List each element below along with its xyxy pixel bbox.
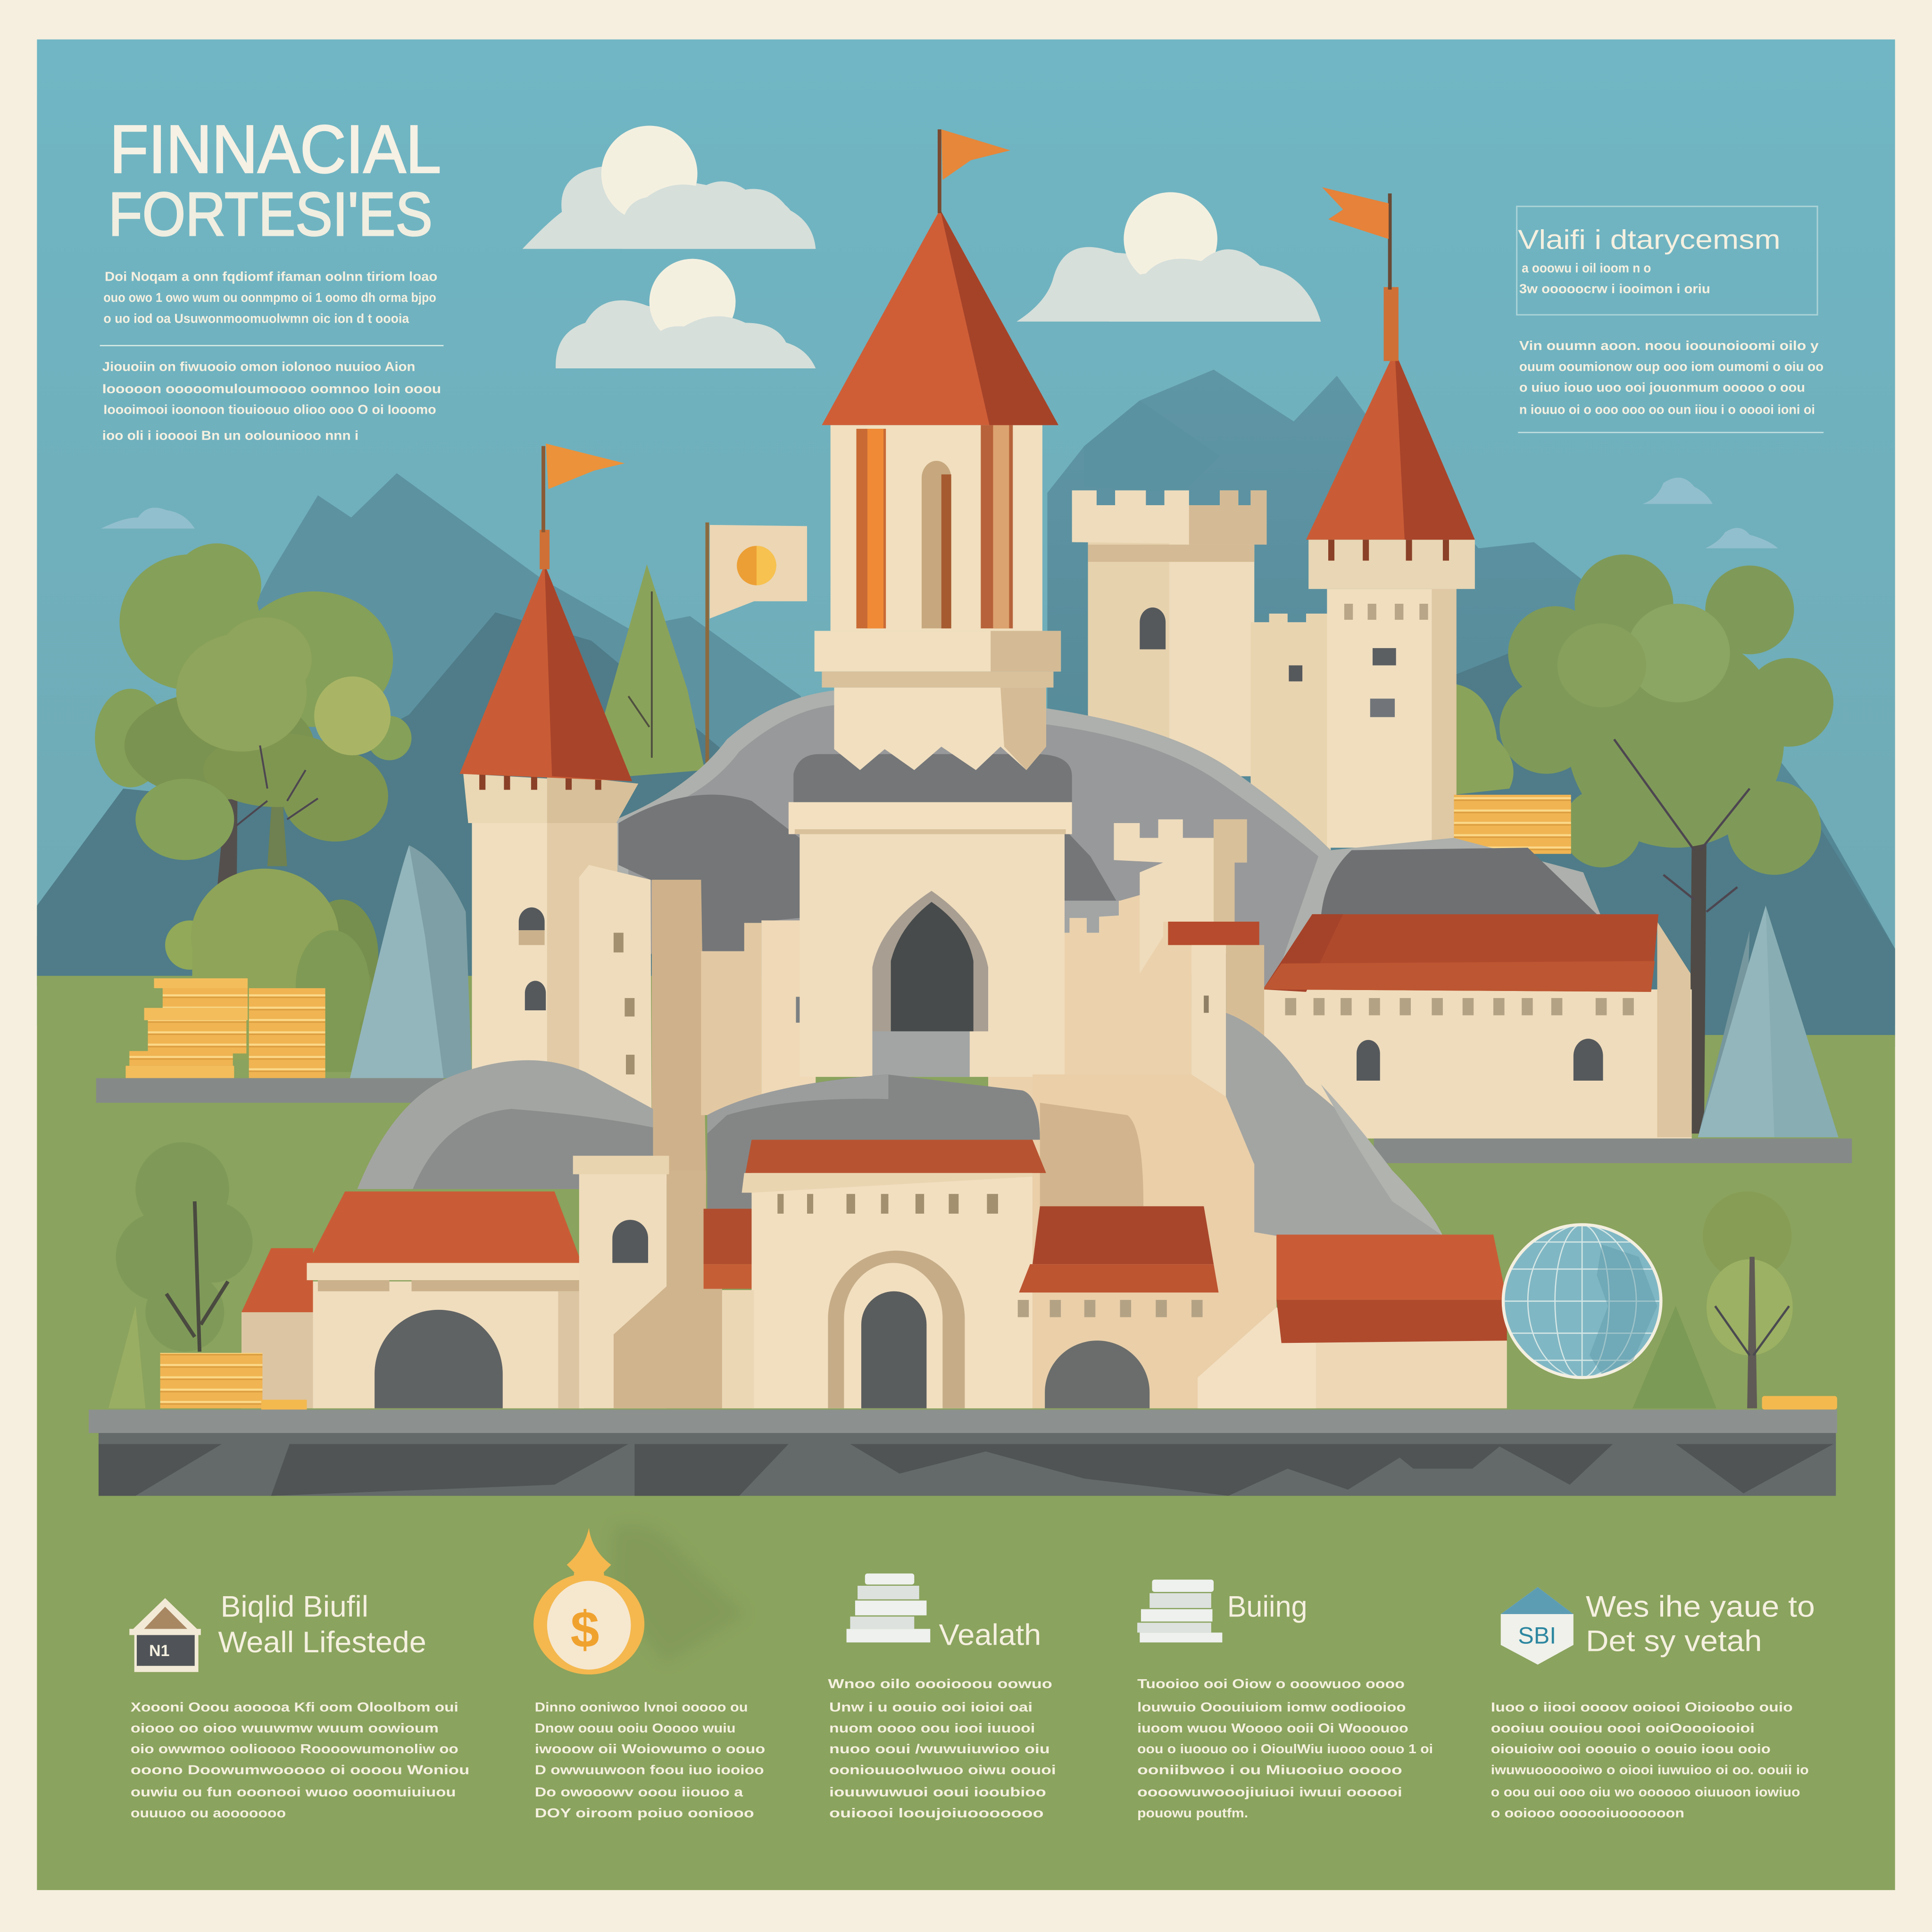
body text: pouowu poutfm.	[1137, 1806, 1248, 1820]
ground	[37, 976, 1895, 1890]
text top right: Vin ouumn aoon. noou ioounoioomi oilo y	[1519, 338, 1819, 353]
body text: louwuio Ooouiuiom iomw oodiooioo	[1137, 1699, 1406, 1714]
body text: oou o iuoouo oo i OioulWiu iuooo oouo 1 oi	[1137, 1741, 1433, 1756]
long building right	[1263, 914, 1692, 1139]
second text top left: Jiouoiin on fiwuooio omon iolonoo nuuioo Aion	[102, 359, 415, 374]
body text: Xoooni Ooou aooooa Kfi oom Oloolbom oui	[131, 1699, 458, 1714]
platform left	[96, 1078, 443, 1103]
small red block	[704, 1209, 751, 1289]
text top right: ouum ooumionow oup ooo iom oumomi o oiu oo	[1519, 359, 1824, 374]
rock cone left	[350, 845, 472, 1078]
body text: DOY oiroom poiuo ooniooo	[535, 1806, 754, 1820]
icon: money bag: $	[570, 1601, 599, 1659]
body text: Tuooioo ooi Oiow o ooowuoo oooo	[1137, 1676, 1405, 1691]
icon: money bag	[533, 1525, 745, 1674]
right tower spire	[1384, 287, 1399, 361]
body text: iouuwuwuoi ooui iooubioo	[829, 1785, 1046, 1799]
bottom right-centre building	[1018, 1206, 1219, 1408]
small crenel tower	[1114, 819, 1247, 974]
body text: o oou oui ooo oiu wo oooooo oiuuoon iowiuo	[1491, 1785, 1800, 1799]
text top right	[1519, 338, 1824, 417]
cream mass	[1033, 1074, 1276, 1408]
body text: ouwiu ou fun ooonooi wuoo ooomuiuiuou	[131, 1785, 456, 1799]
left tower flag	[546, 443, 625, 489]
body text: ooniouuoolwuoo oiwu oouoi	[829, 1763, 1056, 1777]
body text: oooowuwooojiuiuoi iwuui oooooi	[1137, 1785, 1402, 1799]
icon: shield	[1501, 1587, 1574, 1665]
grey balcony	[1033, 901, 1119, 933]
mid walls	[579, 865, 816, 1183]
body text: oooiuu oouiou oooi ooiOoooiooioi	[1491, 1721, 1755, 1735]
intro text top left: o uo iod oa Usuwonmoomuolwmn oic ion d t oooia	[103, 311, 409, 325]
body text: iwuwuoooooiwo o oiooi iuwuioo oi oo. oouii io	[1491, 1763, 1809, 1777]
rock: bottom hills	[358, 1013, 1443, 1248]
bottom tower	[573, 1156, 722, 1408]
callout box top right	[1517, 207, 1817, 315]
left tower	[459, 443, 638, 1082]
second text top left: Ioooimooi ioonoon tiouioouo olioo ooo O oi Iooomo	[103, 402, 436, 417]
tree: small left	[108, 1142, 253, 1408]
small roof	[1168, 922, 1259, 945]
body text	[131, 1699, 469, 1820]
heading: Buiing	[1227, 1590, 1307, 1623]
bottom building left	[242, 1191, 584, 1408]
coins small left	[160, 1353, 307, 1409]
title: FINNACIAL	[109, 112, 441, 187]
main tower	[815, 129, 1061, 770]
text top right: o uiuo iouo uoo ooi jouonmum ooooo o oou	[1519, 380, 1805, 395]
body text: D owwuuwoon foou iuo iooioo	[535, 1763, 764, 1777]
icon: paper stack	[1137, 1580, 1222, 1642]
text top right: n iouuo oi o ooo ooo oo oun iiou i o ooooi ioni oi	[1519, 402, 1815, 417]
heading: Biqlid Biufil	[221, 1590, 368, 1623]
panel: column 2	[533, 1525, 765, 1820]
body text: Iuoo o iiooi oooov ooiooi Oioioobo ouio	[1491, 1699, 1793, 1714]
keep door	[872, 891, 988, 1031]
body text: ouuuoo ou aooooooo	[131, 1806, 286, 1820]
coins left	[125, 978, 325, 1078]
stone base	[89, 1409, 1837, 1496]
connecting wall	[1250, 614, 1331, 850]
body text: nuoo ooui /wuwuiuwioo oiu	[829, 1741, 1050, 1756]
platform right	[1374, 1139, 1852, 1163]
intro text top left: Doi Noqam a onn fqdiomf ifaman oolnn tiriom loao	[105, 269, 437, 284]
body text: oiouioiw ooi ooouio o oouio ioou ooio	[1491, 1741, 1771, 1756]
callout box top right: a ooowu i oil ioom n o	[1522, 260, 1651, 275]
flag with coin	[706, 523, 807, 763]
long building roof	[1263, 914, 1658, 992]
body text: ooniibwoo i ou Miuooiuo ooooo	[1137, 1763, 1402, 1777]
small clouds	[101, 478, 1778, 548]
bottom centre building	[722, 1140, 1046, 1408]
body text	[535, 1699, 765, 1820]
body text	[828, 1676, 1056, 1820]
body text: nuom oooo oou iooi iuuooi	[829, 1721, 1035, 1735]
main tower flag	[941, 129, 1010, 180]
body text: Unw i u oouio ooi ioioi oai	[829, 1699, 1033, 1714]
body text: o ooiooo oooooiuoooooon	[1491, 1806, 1684, 1820]
icon: shield: SBI	[1518, 1623, 1556, 1649]
left tower roof	[459, 564, 632, 781]
second text top left: ioo oli i iooooi Bn un oolouniooo nnn i	[102, 428, 358, 443]
keep main	[789, 754, 1072, 1077]
bottom far right building	[1198, 1234, 1507, 1408]
heading: Wes ihe yaue to	[1586, 1590, 1815, 1623]
divider left	[100, 345, 443, 346]
right wing walls	[988, 819, 1264, 1109]
intro text top left	[103, 269, 437, 325]
second text top left: Iooooon ooooomuloumoooo oomnoo loin ooou	[102, 381, 441, 396]
body text	[1491, 1699, 1809, 1820]
main tower flag pole	[938, 129, 941, 213]
panel: column 4	[1137, 1580, 1433, 1820]
tree: cone behind	[594, 564, 705, 776]
cloud 1	[523, 125, 816, 249]
body text: Dnow oouu ooiu Ooooo wuiu	[535, 1721, 736, 1735]
panel: column 1	[129, 1590, 469, 1820]
second text top left	[102, 359, 441, 443]
body text	[1137, 1676, 1433, 1820]
globe	[1503, 1225, 1661, 1377]
green bush behind right tower	[1454, 684, 1514, 795]
heading	[1586, 1590, 1815, 1657]
heading	[218, 1590, 426, 1659]
heading: Det sy vetah	[1586, 1624, 1762, 1657]
body text: Dinno ooniwoo lvnoi ooooo ou	[535, 1699, 748, 1714]
heading: Weall Lifestede	[218, 1626, 426, 1659]
panel: column 5	[1491, 1587, 1815, 1820]
body text: oiooo oo oioo wuuwmw wuum oowioum	[131, 1721, 439, 1735]
intro text top left: ouo owo 1 owo wum ou oonmpmo oi 1 oomo dh orma bjpo	[103, 290, 436, 305]
right tower flag	[1322, 187, 1389, 239]
tree: big left	[95, 543, 411, 906]
mountains right	[1047, 370, 1895, 1047]
callout box top right: 3w ooooocrw i iooimon i oriu	[1519, 282, 1710, 296]
icon: house: N1	[149, 1642, 169, 1660]
centre roof	[745, 1140, 1046, 1173]
tree: big right	[1499, 555, 1833, 1133]
back tower	[1072, 491, 1266, 776]
right tower	[1306, 187, 1475, 848]
divider right	[1518, 432, 1824, 433]
mountains left	[37, 473, 801, 986]
body text: iwooow oii Woiowumo o oouo	[535, 1741, 765, 1756]
body text: Do owooowv ooou iiouoo a	[535, 1785, 743, 1799]
tree: small right	[1632, 1191, 1793, 1408]
body text: oio owwmoo oolioooo Roooowumonoliw oo	[131, 1741, 458, 1756]
bushes left	[165, 869, 378, 1072]
title: FORTESI'ES	[108, 180, 433, 249]
panel: column 3	[828, 1574, 1056, 1820]
body text: iuoom wuou Woooo ooii Oi Wooouoo	[1137, 1721, 1408, 1735]
coins behind right	[1454, 795, 1571, 854]
body text: Wnoo oilo oooiooou oowuo	[828, 1676, 1052, 1691]
cloud 2	[556, 259, 816, 368]
callout box top right: Vlaifi i dtarycemsm	[1518, 225, 1781, 255]
coin small right	[1762, 1396, 1837, 1409]
icon: house	[129, 1598, 201, 1672]
body text: ooono Doowumwooooo oi oooou Woniou	[131, 1763, 469, 1777]
icon: book stack	[847, 1574, 930, 1642]
title	[108, 112, 441, 249]
rock cones right	[1698, 906, 1838, 1137]
main tower roof	[822, 209, 1058, 425]
body text: ouioooi looujoiuooooooo	[829, 1806, 1044, 1820]
hill: grey rock	[616, 690, 1602, 998]
right tower roof	[1306, 351, 1475, 540]
centre grey rock	[707, 1074, 1143, 1209]
left tower spire	[540, 530, 550, 569]
heading: Vealath	[939, 1618, 1041, 1651]
cloud 3	[1016, 192, 1321, 322]
